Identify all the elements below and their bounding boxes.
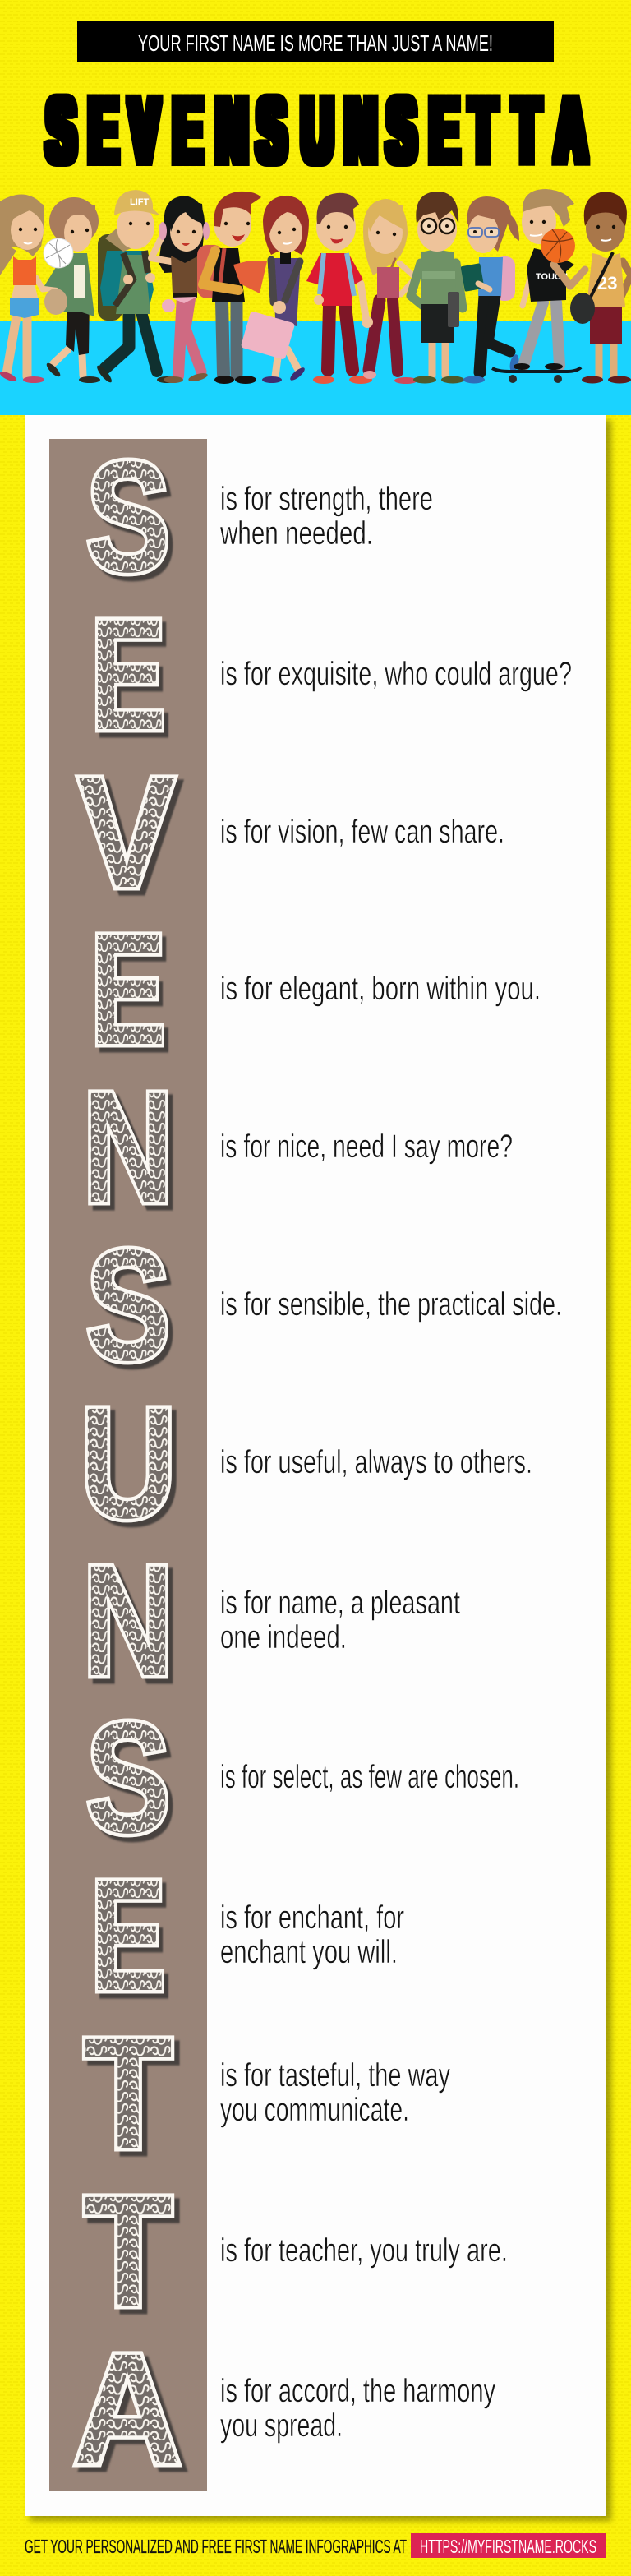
person 9: boy with glasses and green sweater [411,192,464,383]
row 2: E [90,588,572,763]
person 11: skater with basketball: TOUCH [536,272,568,282]
row 10: E [90,1849,404,2024]
row 4: E [90,903,541,1078]
brown letter column [49,439,207,2491]
person 2: girl with volleyball [44,197,100,383]
row 1: S: when needed. [219,515,373,552]
row 1: S: is for strength, there [220,481,433,517]
person 3: hiker with cap and backpack: LIFT [130,197,149,207]
person 10: girl with ponytail and tablet [461,196,520,383]
white content panel [25,415,606,2516]
row 8: N: N [83,1533,173,1709]
person 7: boy in red tee [306,193,372,384]
person 12: boy in yellow jersey [570,192,631,383]
row 8: N [83,1533,460,1709]
person 12: boy in yellow jersey: 23 [597,273,617,293]
row 8: N: one indeed. [220,1619,347,1655]
person 8: blonde girl [362,199,417,384]
row 7: U [80,1375,532,1551]
row 1: S: S [86,429,170,605]
blue floor band [0,321,631,415]
row 11: T: T [84,2006,173,2182]
tagline banner [77,21,554,62]
person 5: boy with open book [197,192,267,384]
row 5: N: N [83,1059,173,1235]
row 9: S [86,1690,519,1866]
title: name: SEVENSUNSETTA [47,79,587,182]
row 3: V: V [78,745,175,921]
person 11: skater with basketball [492,189,585,383]
row 5: N: is for nice, need I say more? [220,1129,513,1165]
illustration: group of students [0,189,631,385]
row 12: T [84,2163,508,2340]
row 13: A: you spread. [220,2407,343,2444]
row 10: E: E [90,1849,166,2024]
row 13: A [73,2320,495,2497]
row 9: S: S [86,1690,170,1866]
row 1: S [86,429,433,605]
row 4: E: E [90,903,166,1078]
row 13: A: A [73,2320,182,2497]
row 12: T: T [84,2163,173,2340]
row 8: N: is for name, a pleasant [220,1585,460,1621]
row 10: E: enchant you will. [220,1934,398,1970]
row 5: N [83,1059,513,1235]
row 11: T: is for tasteful, the way [220,2057,450,2094]
row 3: V: is for vision, few can share. [220,814,504,850]
row 7: U: U [80,1375,177,1551]
person 6: girl with pink case [241,196,309,383]
row 3: V [78,745,504,921]
row 12: T: is for teacher, you truly are. [220,2232,508,2269]
person 4: girl with headphones [151,196,210,383]
row 2: E: E [90,588,166,763]
row 11: T [84,2006,450,2182]
row 10: E: is for enchant, for [220,1900,404,1936]
person 3: hiker with cap and backpack [95,190,177,385]
row 6: S [86,1217,562,1393]
person 1: girl in orange top [0,194,62,383]
row 6: S: S [86,1217,170,1393]
row 13: A: is for accord, the harmony [220,2373,495,2409]
row 11: T: you communicate. [220,2092,409,2128]
